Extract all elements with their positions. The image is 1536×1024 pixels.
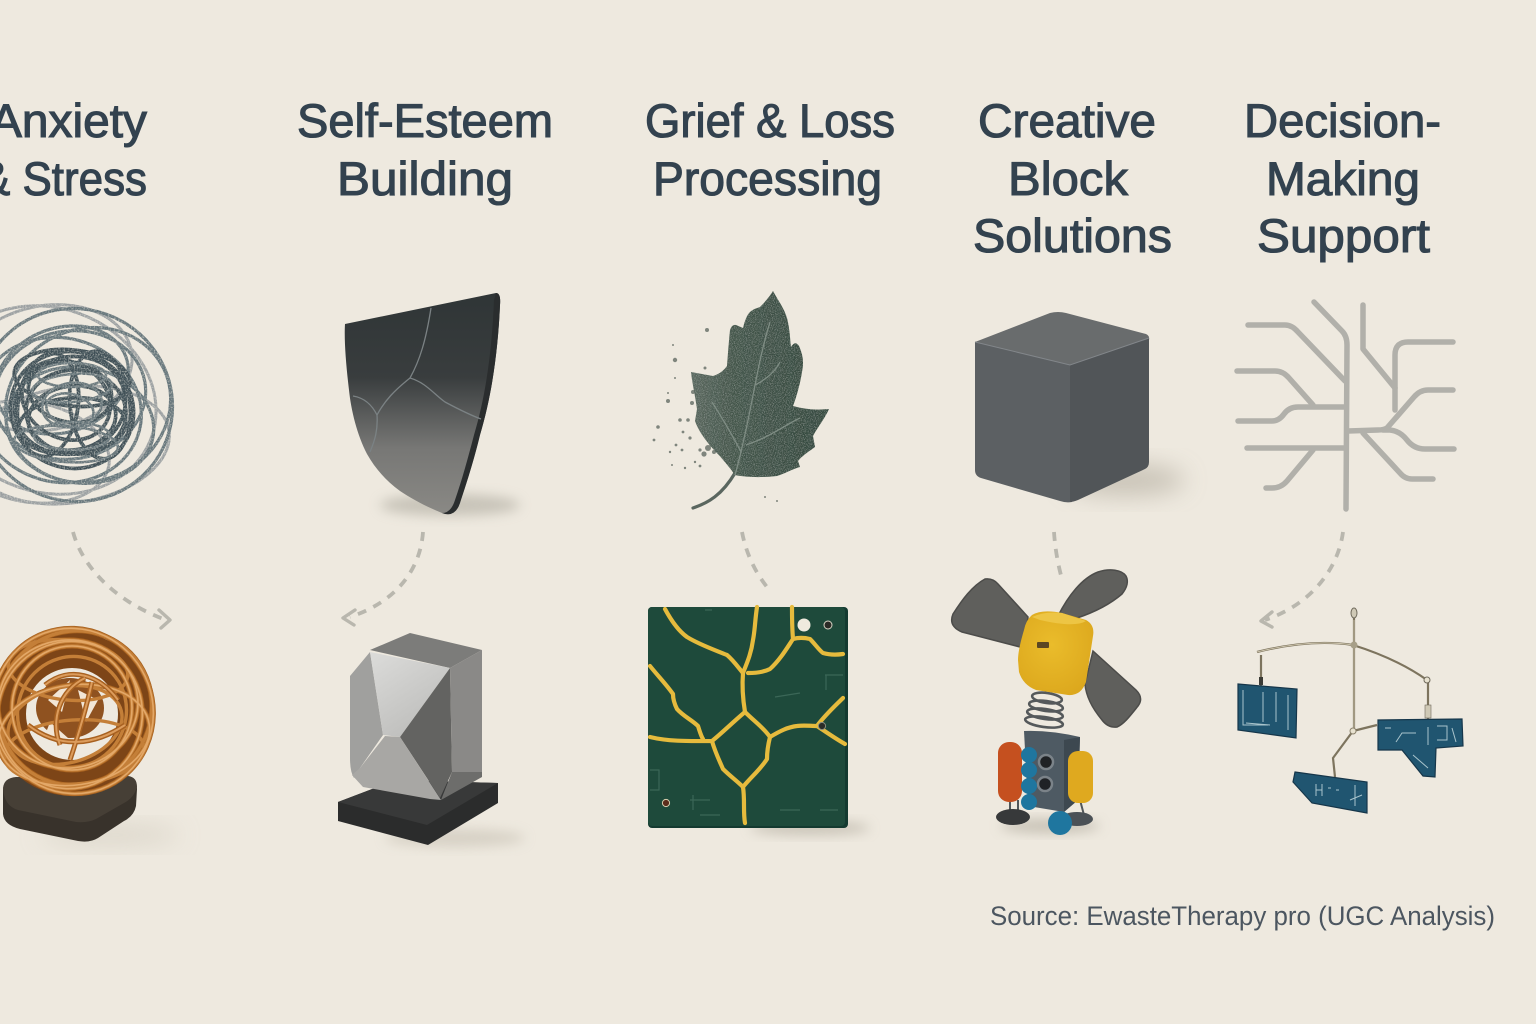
arrow: leaf to kintsugi board	[742, 532, 767, 587]
shadow under toy	[1000, 819, 1100, 833]
icon: branching decision tree	[1237, 302, 1454, 509]
object: copper wire ball	[0, 599, 183, 817]
heading: Creative Block Solutions: Solutions	[973, 209, 1172, 262]
arrow: block to toy	[1054, 532, 1062, 579]
object: fan and spring toy	[952, 570, 1141, 835]
heading: Self-Esteem Building: Self-Esteem	[297, 94, 553, 147]
shadow under faceted cube	[385, 829, 525, 847]
object: kintsugi circuit board	[648, 607, 848, 828]
heading: Creative Block Solutions: Block	[1008, 152, 1129, 205]
heading: Self-Esteem Building: Building	[337, 152, 513, 205]
spring	[1024, 691, 1064, 730]
heading: Creative Block Solutions	[973, 94, 1172, 262]
lower panel	[1293, 772, 1367, 813]
arrow: scribble to copper ball	[73, 532, 170, 628]
icon: grey creative block cube	[975, 312, 1149, 502]
heading: Decision-Making Support	[1244, 94, 1441, 262]
shadow behind grey block	[1065, 464, 1185, 496]
fan blades	[952, 570, 1141, 727]
heading: Decision-Making Support: Support	[1257, 209, 1430, 262]
shadow under circuit board	[750, 821, 870, 835]
heading: Grief & Loss Processing: Processing	[653, 152, 882, 205]
heading: Creative Block Solutions: Creative	[978, 94, 1156, 147]
legs and feet	[1010, 800, 1084, 815]
arrow: shield to faceted cube	[343, 532, 423, 625]
body	[1024, 731, 1080, 812]
heading: Anxiety & Stress	[0, 94, 147, 205]
source note: Source: EwasteTherapy pro (UGC Analysis)	[990, 901, 1495, 931]
icon: disintegrating leaf	[653, 291, 829, 508]
leaf blade	[691, 291, 829, 477]
object: faceted silver cube	[350, 633, 482, 800]
faint circuit traces	[650, 610, 843, 815]
yellow capsule	[1068, 751, 1093, 803]
heading: Decision-Making Support: Decision-	[1244, 94, 1441, 147]
object: dark base under faceted cube	[338, 780, 498, 845]
gold kintsugi veins	[650, 607, 845, 823]
icon: cracked metal shield shard	[345, 293, 500, 514]
left panel	[1238, 684, 1297, 738]
arrow: tree to mobile	[1261, 532, 1343, 627]
icon: pencil scribble tangle	[0, 273, 208, 537]
heading: Self-Esteem Building	[297, 94, 553, 205]
object: stone base for copper ball	[3, 776, 137, 842]
object: circuit board mobile	[1238, 608, 1463, 813]
heading: Grief & Loss Processing	[645, 94, 895, 205]
shadow under shield	[380, 494, 520, 516]
leaf dust specks	[653, 328, 778, 502]
blue beads	[1021, 747, 1072, 835]
leaf veins	[712, 322, 800, 475]
heading: Decision-Making Support: Making	[1266, 152, 1420, 205]
right panel	[1378, 719, 1463, 777]
board holes	[798, 618, 810, 632]
leaf stem	[693, 473, 735, 508]
shadow under copper ball	[40, 825, 180, 845]
red capsule	[998, 742, 1022, 802]
yellow head	[1018, 611, 1093, 695]
mobile wires	[1257, 617, 1428, 777]
heading: Grief & Loss Processing: Grief & Loss	[645, 94, 895, 147]
